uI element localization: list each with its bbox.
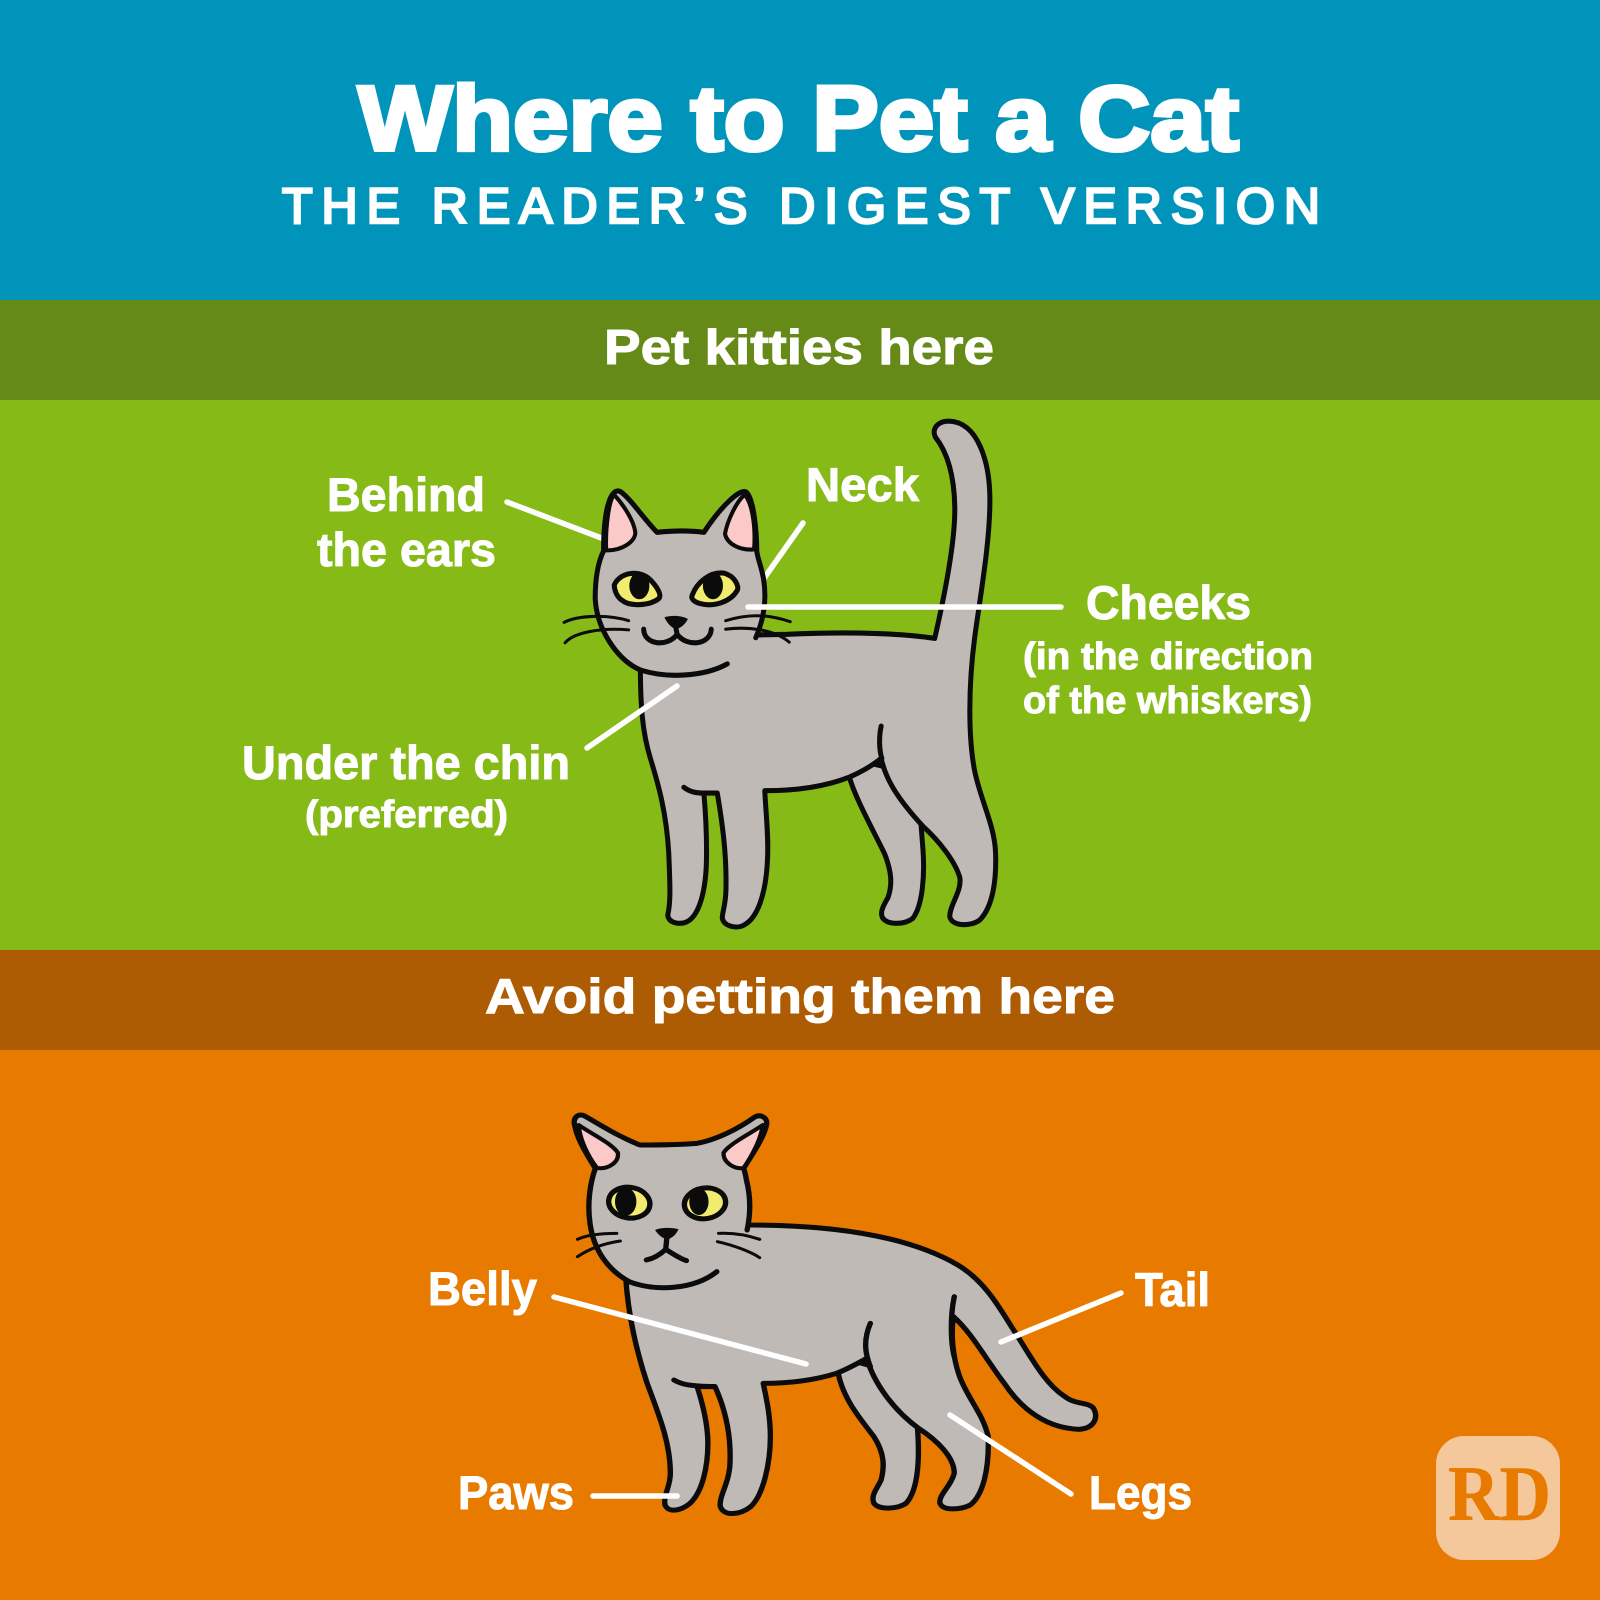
head outline [574, 1115, 767, 1288]
whiskers [564, 616, 790, 643]
far hind leg [849, 758, 924, 923]
right ear [724, 1125, 763, 1168]
body, legs and tail [626, 1223, 1096, 1514]
label: cheeks: (in the direction [1023, 636, 1313, 678]
nose [664, 616, 688, 629]
heading band: avoid petting them here: Avoid petting them here [485, 970, 1115, 1024]
left eye [606, 1184, 653, 1221]
left ear [579, 1125, 618, 1168]
whiskers [577, 1233, 760, 1258]
left ear [606, 495, 635, 550]
callout line: cheeks [748, 604, 1061, 610]
callout line: belly [554, 1297, 806, 1364]
left eye [614, 572, 660, 605]
label: under the chin [242, 736, 570, 836]
logo: RD [1436, 1436, 1560, 1560]
heading band: pet kitties here: Pet kitties here [604, 321, 994, 375]
label: cheeks: of the whiskers) [1023, 680, 1312, 722]
label: tail: Tail [1135, 1263, 1210, 1316]
label: legs: Legs [1089, 1466, 1192, 1519]
title: Where to Pet a Cat [358, 68, 1239, 170]
label: paws: Paws [458, 1466, 574, 1519]
callout line: under the chin [587, 686, 677, 748]
panel: header [0, 0, 1600, 300]
label: under the chin: (preferred) [305, 794, 508, 836]
hip and shoulder lines [674, 1297, 954, 1387]
heading band: pet kitties here [0, 300, 1600, 400]
body, legs and tail [640, 421, 996, 927]
callout line: paws [593, 1493, 677, 1499]
callout line: tail [1001, 1293, 1121, 1342]
mouth [646, 1238, 686, 1261]
head outline [595, 491, 765, 675]
label: cheeks [1023, 576, 1313, 722]
right eye [682, 1185, 728, 1222]
right ear [725, 495, 755, 550]
label: belly: Belly [428, 1262, 537, 1315]
label: behind the ears: Behind [327, 468, 485, 521]
callout line: legs [950, 1415, 1071, 1494]
illustration: standing cat with lowered tail [574, 1115, 1096, 1514]
panel: where to pet [0, 400, 1600, 950]
illustration: standing cat with raised tail [564, 421, 996, 927]
subtitle: THE READER’S DIGEST VERSION [282, 178, 1320, 234]
label: neck: Neck [806, 458, 920, 511]
hip and shoulder lines [684, 726, 882, 793]
label: behind the ears: the ears [317, 523, 496, 576]
nose [655, 1228, 679, 1239]
head [574, 1115, 767, 1288]
mouth [644, 626, 711, 643]
heading band: avoid petting them here [0, 950, 1600, 1050]
label: cheeks: Cheeks [1086, 576, 1251, 629]
logo: RD: RD [1448, 1450, 1551, 1537]
callout line: neck [760, 523, 803, 584]
label: under the chin: Under the chin [242, 736, 570, 789]
far hind leg [838, 1357, 918, 1508]
head [595, 491, 765, 675]
callout line: behind the ears [507, 502, 604, 539]
panel: where to avoid [0, 1050, 1600, 1600]
right eye [692, 572, 738, 605]
label: behind the ears [317, 468, 496, 576]
